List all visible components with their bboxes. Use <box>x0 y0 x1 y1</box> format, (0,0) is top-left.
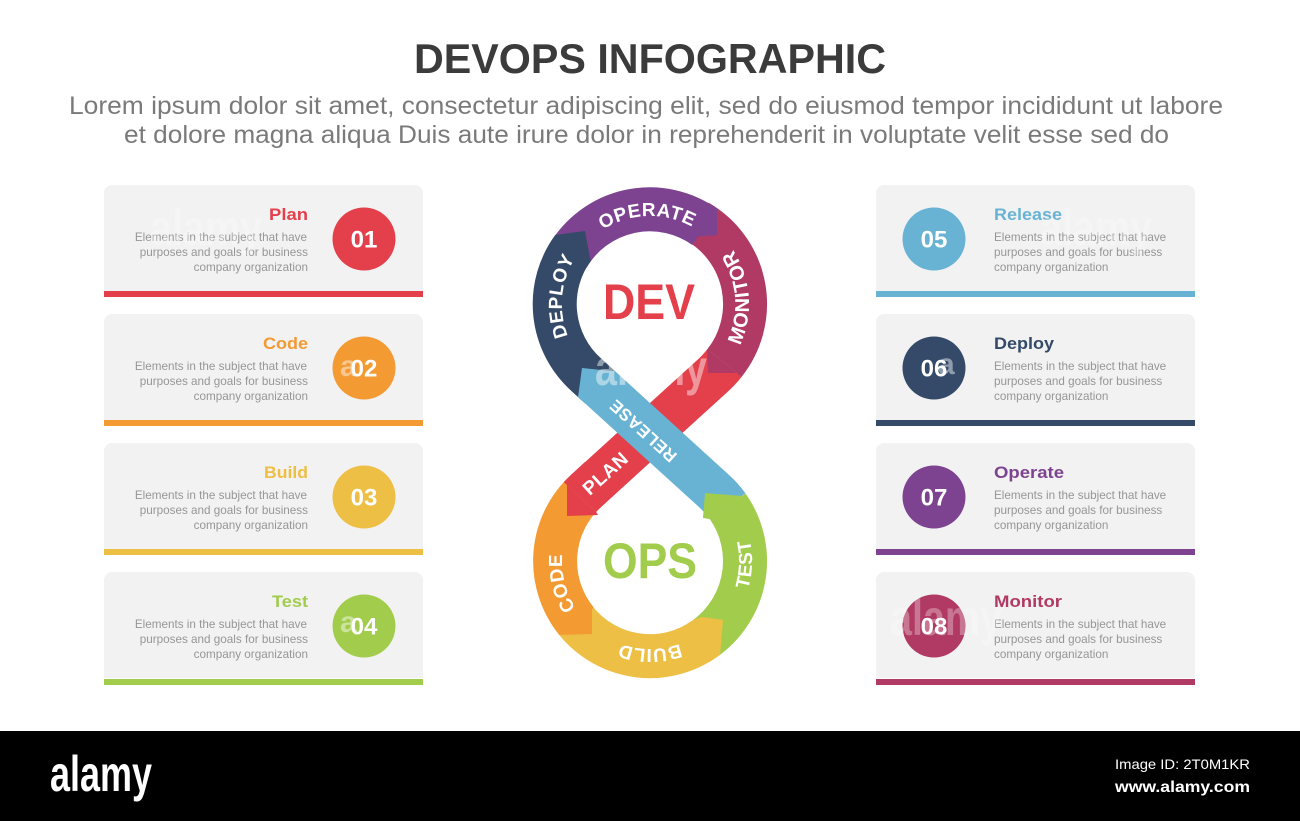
panel: 05 Release <box>876 185 1195 297</box>
label: plan: PLAN <box>579 448 633 500</box>
panel: 08 Monitor: company organization <box>994 648 1108 661</box>
label: release: RELEASE <box>606 395 681 466</box>
panel: 02 Code: Code <box>263 334 308 353</box>
panel: 06 Deploy: company organization <box>994 390 1108 403</box>
panel: 06 Deploy <box>876 314 1195 426</box>
panel: 07 Operate <box>876 443 1195 555</box>
panel: 06 Deploy: Deploy <box>994 334 1055 353</box>
segment: deploy band <box>555 231 600 387</box>
panel: 04 Test: 04 <box>351 614 378 640</box>
label: deploy: DEPLOY <box>548 252 572 339</box>
subtitle: et dolore magna aliqua Duis aute irure dolor in reprehenderit in voluptate velit esse sed do <box>124 121 1169 149</box>
panel: 05 Release: company organization <box>994 261 1108 274</box>
segment: build band <box>569 611 723 656</box>
panel: 07 Operate: purposes and goals for business <box>994 504 1162 517</box>
panel: 01 Plan <box>104 185 423 297</box>
panel: 04 Test: purposes and goals for business <box>140 633 308 646</box>
panel: 06 Deploy: purposes and goals for business <box>994 375 1162 388</box>
title: DEVOPS INFOGRAPHIC <box>414 35 886 82</box>
watermark overlays: alamy <box>150 200 262 256</box>
watermark overlays: a <box>340 606 357 639</box>
panel: 05 Release: purposes and goals for business <box>994 246 1162 259</box>
segment: operate band <box>568 209 717 256</box>
panel: 08 Monitor: Monitor <box>994 592 1062 611</box>
segment: release band <box>578 368 728 506</box>
label: operate: OPERATE <box>599 203 696 228</box>
panel: 05 Release: Elements in the subject that have <box>994 231 1166 244</box>
panel: 04 Test <box>104 572 423 685</box>
website: www.alamy.com <box>1114 779 1250 796</box>
panel: 07 Operate: company organization <box>994 519 1108 532</box>
watermark overlays: a <box>340 350 357 383</box>
label: monitor: MONITOR <box>723 250 749 344</box>
panel: 08 Monitor: purposes and goals for business <box>994 633 1162 646</box>
infinity loop diagram <box>532 187 768 678</box>
watermark overlays: alamy <box>890 590 1002 646</box>
panel: 02 Code: purposes and goals for business <box>140 375 308 388</box>
subtitle <box>69 92 1223 149</box>
panel: 07 Operate: 07 <box>921 484 947 512</box>
panel: 05 Release: 05 <box>921 226 947 254</box>
panel: 01 Plan: purposes and goals for business <box>140 246 308 259</box>
subtitle: Lorem ipsum dolor sit amet, consectetur adipiscing elit, sed do eiusmod tempor incididunt ut labore <box>69 92 1223 120</box>
panel: 07 Operate: Elements in the subject that have <box>994 489 1166 502</box>
panel: 02 Code <box>104 314 423 426</box>
panel: 08 Monitor: Elements in the subject that have <box>994 618 1166 631</box>
panel: 03 Build: company organization <box>194 519 308 532</box>
panel: 06 Deploy: Elements in the subject that have <box>994 360 1166 373</box>
panel: 08 Monitor <box>876 572 1195 685</box>
center label: OPS: OPS <box>603 533 697 589</box>
panel: 03 Build: 03 <box>351 484 377 512</box>
watermark overlays: alamy <box>595 340 707 396</box>
center label: DEV: DEV <box>603 274 696 330</box>
segment: plan arrow head <box>564 478 600 516</box>
segment: code band <box>555 491 593 635</box>
panel: 03 Build: purposes and goals for business <box>140 504 308 517</box>
image id: Image ID: 2T0M1KR <box>1115 756 1250 772</box>
panel: 03 Build <box>104 443 423 555</box>
panel: 03 Build: Build <box>264 463 308 482</box>
panel: 01 Plan: company organization <box>194 261 308 274</box>
label: test: TEST <box>735 542 752 587</box>
panel: 02 Code: Elements in the subject that have <box>135 360 307 373</box>
label: build: BUILD <box>619 644 682 662</box>
panel: 01 Plan: Plan <box>269 205 308 224</box>
panel: 03 Build: Elements in the subject that have <box>135 489 307 502</box>
panel: 01 Plan: 01 <box>351 226 377 254</box>
watermark overlays: a <box>938 348 955 381</box>
panel: 02 Code: 02 <box>351 356 377 382</box>
watermark overlays: alamy <box>1040 200 1152 256</box>
segment: monitor band <box>698 222 745 377</box>
segment: test band <box>698 493 746 643</box>
watermark overlays <box>150 200 1152 646</box>
footer logo: alamy <box>50 746 152 802</box>
label: code: CODE <box>548 555 574 612</box>
panel: 08 Monitor: 08 <box>921 614 947 640</box>
panel: 06 Deploy: 06 <box>921 356 947 382</box>
panel: 04 Test: company organization <box>194 648 308 661</box>
panel: 07 Operate: Operate <box>994 463 1064 482</box>
panel: 01 Plan: Elements in the subject that have <box>135 231 307 244</box>
panel: 05 Release: Release <box>994 205 1062 224</box>
panel: 04 Test: Test <box>272 592 308 611</box>
panel: 02 Code: company organization <box>194 390 308 403</box>
segment: plan band <box>586 363 724 491</box>
footer bar <box>0 731 1300 821</box>
panel: 04 Test: Elements in the subject that have <box>135 618 307 631</box>
